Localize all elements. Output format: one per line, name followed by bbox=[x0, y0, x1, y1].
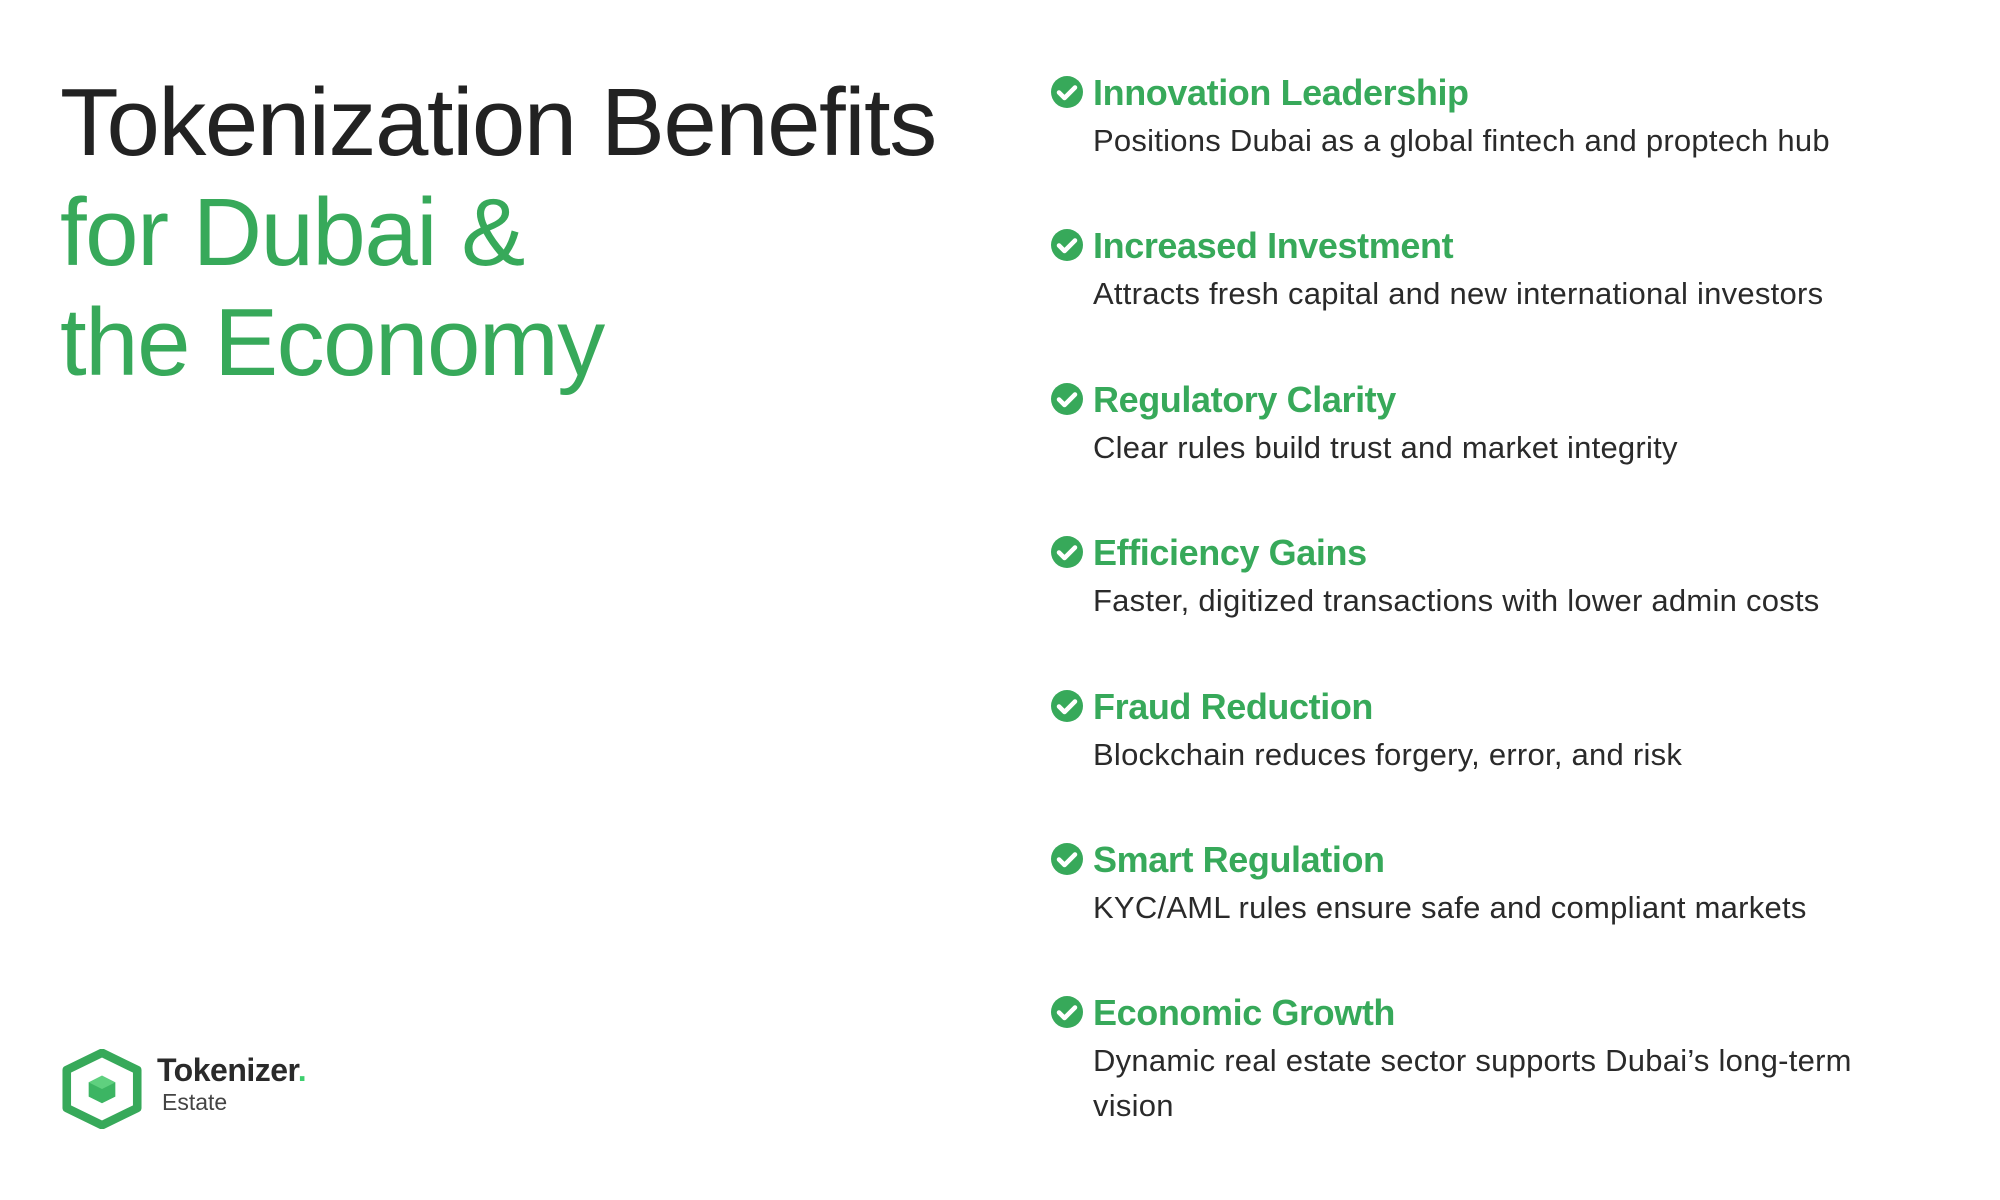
item: increased investment: Attracts fresh capital and new international investors bbox=[1093, 276, 1823, 311]
item: fraud reduction: Blockchain reduces forgery, error, and risk bbox=[1093, 737, 1682, 772]
icon: check bbox=[1051, 690, 1083, 722]
icon: check bbox=[1051, 383, 1083, 415]
item: fraud reduction: Fraud Reduction bbox=[1093, 686, 1373, 727]
item: efficiency gains bbox=[1051, 532, 1820, 618]
title: the Economy bbox=[60, 289, 604, 396]
item: economic growth bbox=[1051, 992, 1852, 1123]
item: regulatory clarity: Regulatory Clarity bbox=[1093, 379, 1396, 420]
logo: Estate bbox=[162, 1089, 227, 1115]
item: increased investment bbox=[1051, 225, 1823, 311]
item: efficiency gains: Faster, digitized transactions with lower admin costs bbox=[1093, 583, 1820, 618]
item: smart regulation: KYC/AML rules ensure safe and compliant markets bbox=[1093, 890, 1807, 925]
item: efficiency gains: Efficiency Gains bbox=[1093, 532, 1367, 573]
item: regulatory clarity: Clear rules build trust and market integrity bbox=[1093, 430, 1678, 465]
title bbox=[60, 69, 936, 396]
item: innovation leadership bbox=[1051, 72, 1830, 158]
item: increased investment: Increased Investment bbox=[1093, 225, 1453, 266]
icon: hex house bbox=[62, 1049, 142, 1129]
item: economic growth: Dynamic real estate sector supports Dubai’s long-term vision bbox=[1093, 1043, 1852, 1123]
logo text: Tokenizer. bbox=[157, 1052, 306, 1088]
icon: check bbox=[1051, 843, 1083, 875]
icon: check bbox=[1051, 996, 1083, 1028]
logo bbox=[62, 1049, 306, 1129]
icon: check bbox=[1051, 229, 1083, 261]
item: smart regulation: Smart Regulation bbox=[1093, 839, 1385, 880]
title: Tokenization Benefits bbox=[60, 69, 936, 176]
item: innovation leadership: Innovation Leadership bbox=[1093, 72, 1469, 113]
icon: check bbox=[1051, 76, 1083, 108]
item: innovation leadership: Positions Dubai as a global fintech and proptech hub bbox=[1093, 123, 1830, 158]
item: fraud reduction bbox=[1051, 686, 1682, 772]
title: for Dubai & bbox=[60, 179, 524, 286]
item: economic growth: Economic Growth bbox=[1093, 992, 1395, 1033]
item: smart regulation bbox=[1051, 839, 1807, 925]
item: regulatory clarity bbox=[1051, 379, 1678, 465]
icon: check bbox=[1051, 536, 1083, 568]
